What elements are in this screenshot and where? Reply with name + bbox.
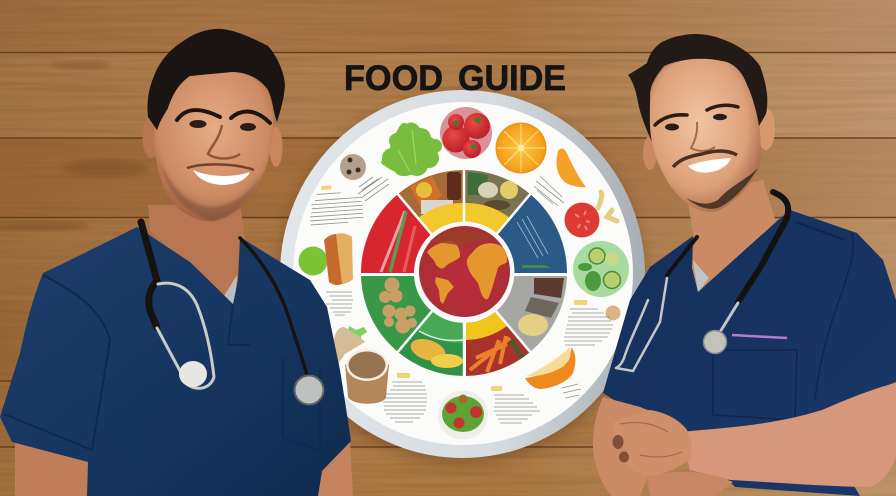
chest piece	[704, 330, 726, 354]
stethoscope	[141, 222, 324, 404]
ears	[757, 108, 775, 150]
title	[344, 59, 566, 98]
nuggets	[379, 278, 417, 334]
yellow band	[418, 203, 464, 235]
pocket pink line	[732, 335, 787, 338]
neck	[148, 205, 246, 308]
icon: pasta bits	[598, 192, 617, 221]
stubble shadow	[160, 160, 263, 221]
hair	[147, 29, 285, 130]
sector: red	[361, 194, 432, 273]
arms and hands	[593, 383, 896, 496]
text block: lower middle	[491, 386, 540, 423]
smile	[193, 170, 250, 185]
arms	[15, 425, 353, 496]
icon: lettuce	[381, 122, 442, 176]
continents	[427, 241, 507, 304]
text block: upper right	[534, 176, 564, 206]
scrub top	[0, 227, 351, 496]
icon: salad plate	[438, 390, 488, 440]
text block: left lower	[326, 292, 353, 315]
ears	[142, 116, 160, 158]
food guide plate	[279, 90, 645, 463]
food wheel	[361, 170, 567, 376]
chest piece left	[179, 361, 207, 387]
head	[628, 34, 775, 212]
icon: cereal cup	[345, 349, 389, 404]
icon: lemon wedge	[557, 149, 586, 187]
right doctor	[593, 34, 896, 496]
icon: cucumber plate	[573, 241, 629, 297]
small text blocks on the plate	[308, 176, 613, 423]
icon: melon wedge	[525, 347, 575, 389]
icon: meat slab	[324, 233, 353, 285]
scrub top	[603, 210, 896, 496]
sector: top left food	[398, 170, 464, 235]
nose	[691, 122, 715, 151]
sector: yellow and carrots	[466, 311, 530, 376]
icon: cookie	[340, 154, 366, 180]
white dividers	[361, 170, 567, 376]
neck	[687, 180, 776, 292]
plate white surface	[293, 102, 633, 445]
sector: gray with meals	[496, 276, 567, 352]
yellow band	[464, 203, 510, 235]
sector: green bottom	[398, 311, 464, 376]
text block: lower right	[562, 384, 581, 398]
plate rim	[280, 90, 645, 458]
sector: green left	[361, 276, 432, 352]
eyes	[190, 120, 206, 128]
smile and moustache	[688, 158, 731, 173]
sector: blue	[496, 194, 567, 273]
undershirt	[693, 260, 709, 293]
plate shadow	[279, 95, 645, 463]
icon: green candy	[348, 326, 367, 341]
hair	[628, 34, 767, 142]
sector: top right food	[464, 170, 530, 235]
icon: shell bread	[334, 327, 365, 364]
head	[142, 29, 285, 221]
stethoscope	[616, 192, 788, 371]
icon: tomato slice	[564, 202, 600, 238]
icon: ginger	[606, 306, 620, 320]
beard	[686, 168, 758, 209]
title: FOOD	[344, 59, 443, 98]
text block: upper left diagonal	[358, 177, 389, 201]
text block: lower left	[383, 373, 427, 422]
icon: green ball	[298, 246, 328, 276]
icon: orange slice	[496, 122, 546, 174]
brows	[177, 110, 270, 123]
nose	[208, 125, 240, 158]
globe	[414, 222, 514, 322]
food icons around the plate	[298, 107, 629, 440]
face	[154, 71, 273, 221]
left doctor	[0, 29, 353, 496]
chest piece right	[294, 376, 324, 404]
icon: tomato bowl	[440, 107, 492, 159]
title: GUIDE	[458, 59, 566, 98]
eyes	[665, 124, 679, 130]
undershirt	[224, 275, 237, 306]
text block: right	[564, 300, 613, 345]
text block: upper left	[308, 183, 364, 225]
face	[650, 58, 761, 212]
brows	[655, 105, 738, 125]
